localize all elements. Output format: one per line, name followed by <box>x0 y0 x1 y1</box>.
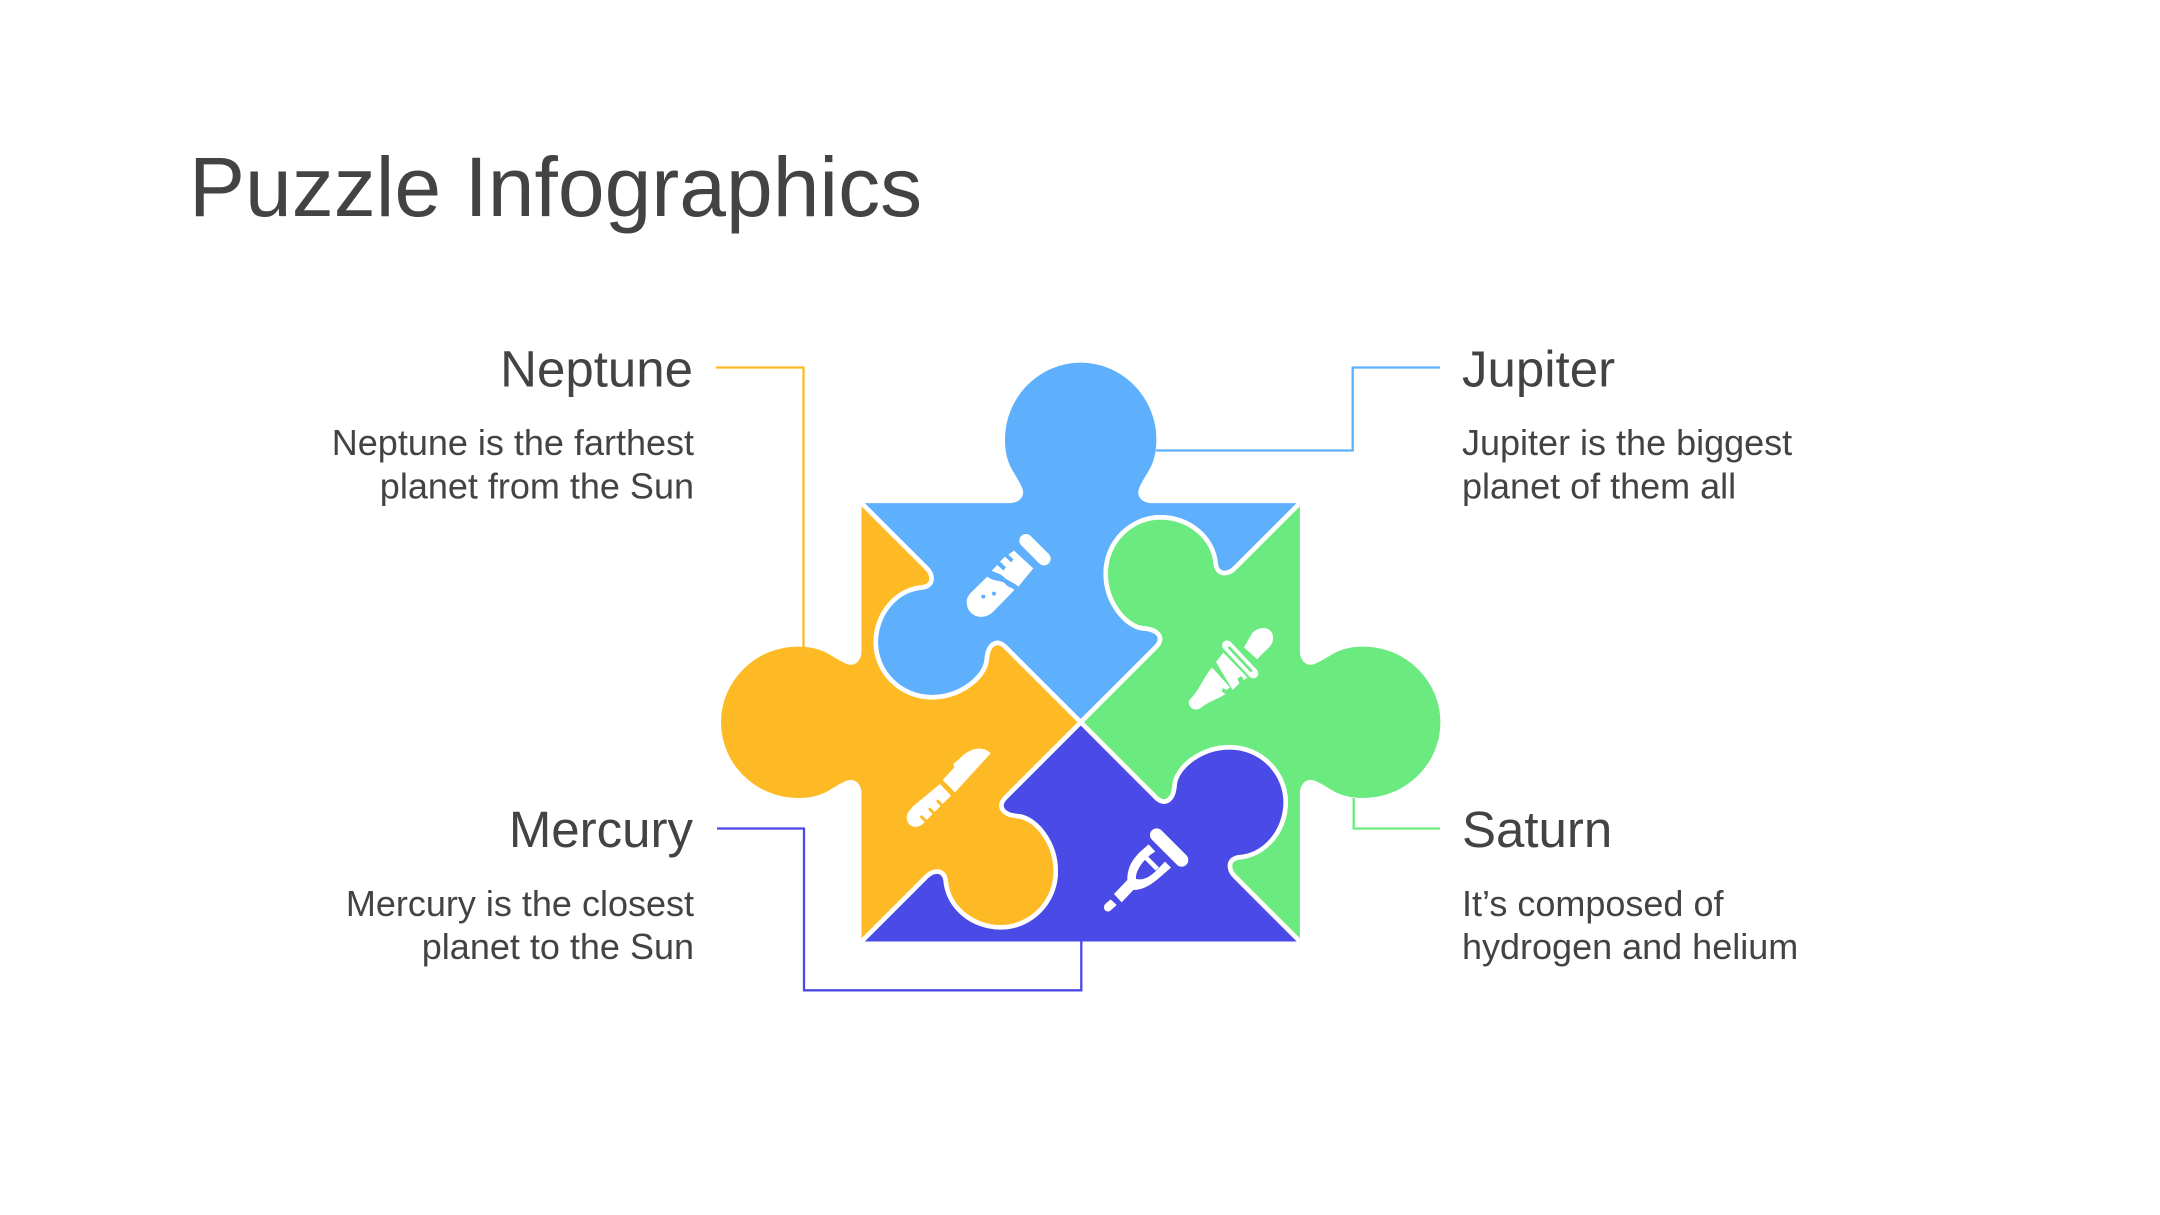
label: Jupiter: Jupiter <box>1462 340 1615 398</box>
icon: crutch <box>1104 835 1182 911</box>
connector: Neptune <box>716 368 804 647</box>
label: Saturn <box>1462 801 1798 967</box>
connector: Saturn <box>1354 798 1440 828</box>
label: Jupiter <box>1462 340 1792 506</box>
label: Jupiter: Jupiter is the biggest <box>1462 422 1792 463</box>
connector: Jupiter <box>1156 368 1440 450</box>
icon: scalpel <box>907 749 991 827</box>
title: Puzzle Infographics <box>189 140 922 234</box>
label: Saturn: Saturn <box>1462 801 1612 858</box>
puzzle <box>719 360 1443 944</box>
label: Saturn: It’s composed of <box>1462 883 1724 924</box>
label: Neptune: planet from the Sun <box>380 466 694 506</box>
label: Neptune: Neptune is the farthest <box>332 422 694 463</box>
puzzle piece: purple <box>859 722 1302 944</box>
label: Jupiter: planet of them all <box>1462 466 1736 506</box>
connector: Mercury <box>717 828 1081 990</box>
label: Mercury: Mercury is the closest <box>346 883 694 924</box>
puzzle piece: blue <box>859 360 1302 722</box>
icon: dropper <box>1189 628 1273 710</box>
icon: test tube <box>967 541 1044 617</box>
label: Mercury: planet to the Sun <box>422 926 694 967</box>
label: Neptune <box>332 340 694 506</box>
puzzle piece: yellow <box>719 501 1081 944</box>
label: Mercury: Mercury <box>509 801 693 858</box>
label: Saturn: hydrogen and helium <box>1462 926 1798 967</box>
puzzle piece: green <box>1081 501 1443 944</box>
label: Mercury <box>346 801 694 967</box>
label: Neptune: Neptune <box>500 340 693 398</box>
